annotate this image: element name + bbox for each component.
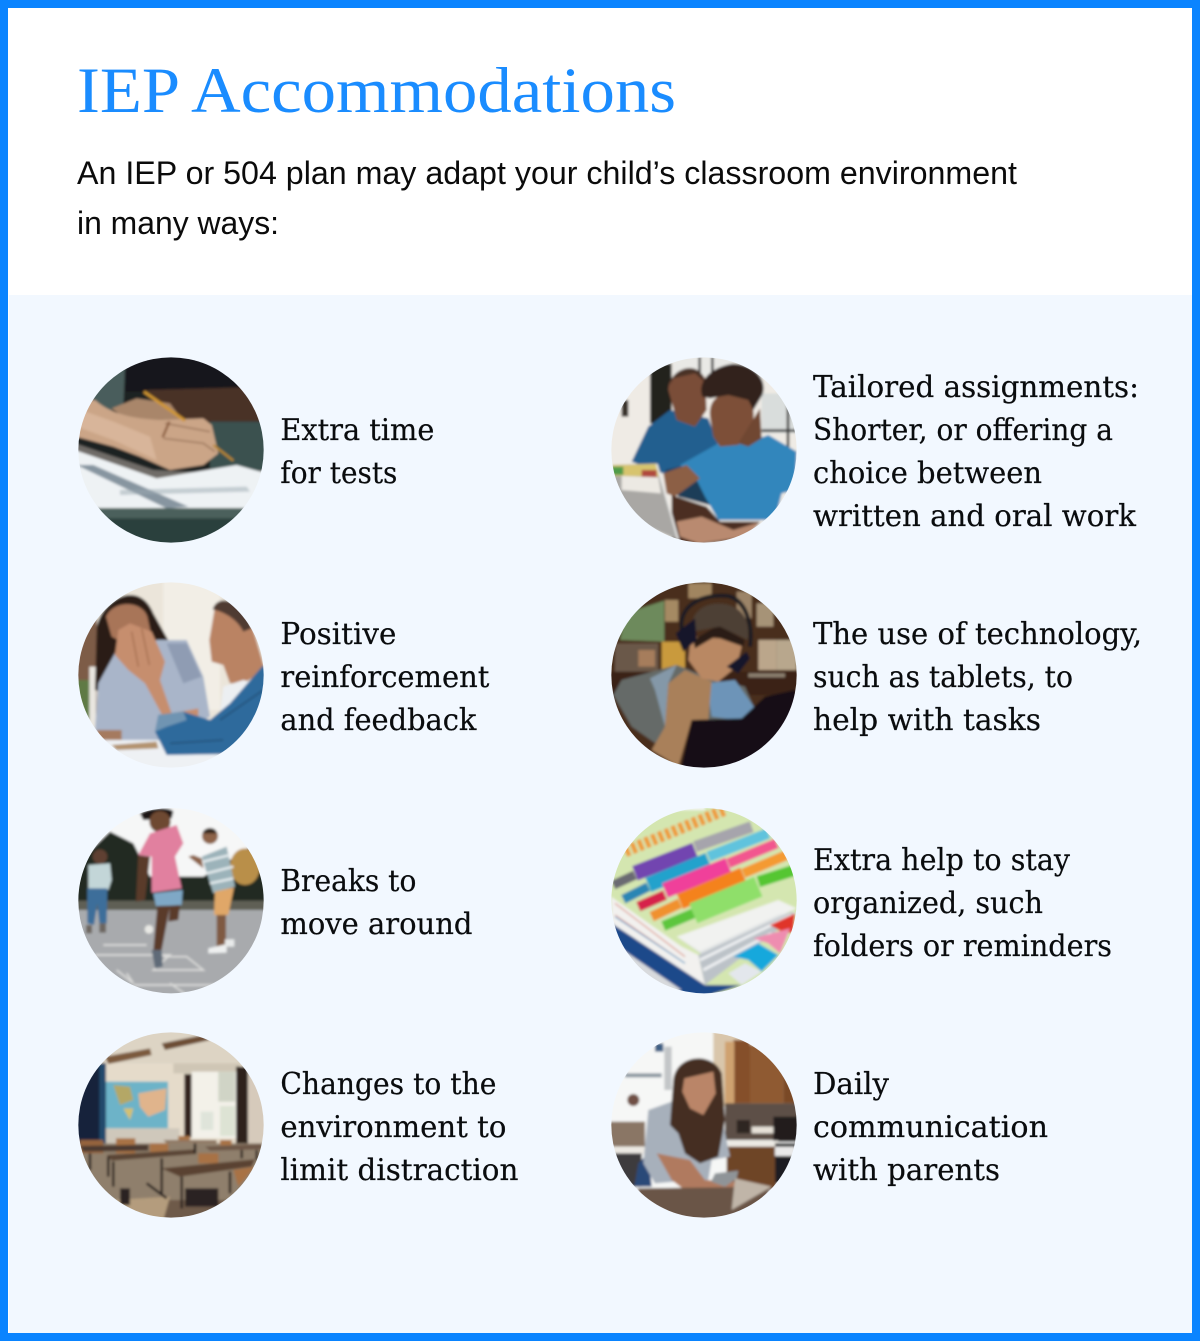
photo: empty classroom	[78, 1032, 264, 1218]
label	[813, 370, 1139, 533]
item: breaks to move around	[70, 800, 473, 1000]
label: Changes to the	[280, 1067, 496, 1101]
intro text: in many ways:	[77, 205, 279, 241]
label: move around	[280, 907, 473, 941]
item: changes to the environment	[70, 1027, 518, 1227]
item: positive reinforcement	[70, 577, 490, 777]
photo: woman using phone in kitchen	[611, 1032, 797, 1218]
label: Shorter, or offering a	[813, 413, 1113, 447]
label: choice between	[813, 456, 1042, 490]
intro text: An IEP or 504 plan may adapt your child’s classroom environment	[77, 155, 1017, 191]
label: such as tablets, to	[813, 660, 1073, 694]
label: environment to	[280, 1110, 506, 1144]
photo: teen with headphones and tablet	[611, 582, 797, 768]
label: Tailored assignments:	[813, 370, 1139, 404]
label: organized, such	[813, 886, 1043, 920]
label: Breaks to	[280, 864, 416, 898]
label: communication	[813, 1110, 1048, 1144]
label	[813, 1067, 1048, 1187]
item: extra time for tests	[78, 357, 434, 543]
item: use of technology	[605, 577, 1142, 780]
label	[813, 617, 1142, 737]
label: and feedback	[280, 703, 477, 737]
label: limit distraction	[280, 1153, 518, 1187]
label: Daily	[813, 1067, 889, 1101]
label	[280, 864, 473, 941]
label: Positive	[280, 617, 396, 651]
title: IEP Accommodations	[77, 55, 676, 127]
label: Extra time	[280, 413, 434, 447]
photo: kids playing hopscotch	[78, 808, 264, 994]
label: for tests	[280, 456, 397, 490]
label	[280, 413, 434, 490]
photo: father and son at laptop	[612, 358, 797, 543]
label	[280, 617, 490, 737]
item: tailored assignments	[605, 350, 1139, 550]
label	[813, 843, 1112, 963]
photo: colored pens on notebook	[611, 808, 797, 994]
label: help with tasks	[813, 703, 1041, 737]
label: folders or reminders	[813, 929, 1112, 963]
item: daily communication	[611, 1032, 1048, 1218]
label: Extra help to stay	[813, 843, 1070, 877]
label: written and oral work	[813, 499, 1137, 533]
photo: woman and boy high five	[78, 582, 264, 768]
label: reinforcement	[280, 660, 490, 694]
label	[280, 1067, 518, 1187]
label: The use of technology,	[813, 617, 1142, 651]
label: with parents	[813, 1153, 1000, 1187]
intro text	[77, 155, 1017, 241]
photo: hand writing with pencil	[78, 357, 264, 543]
lower panel background	[9, 295, 1192, 1333]
item: extra help to stay organized	[605, 800, 1112, 1000]
